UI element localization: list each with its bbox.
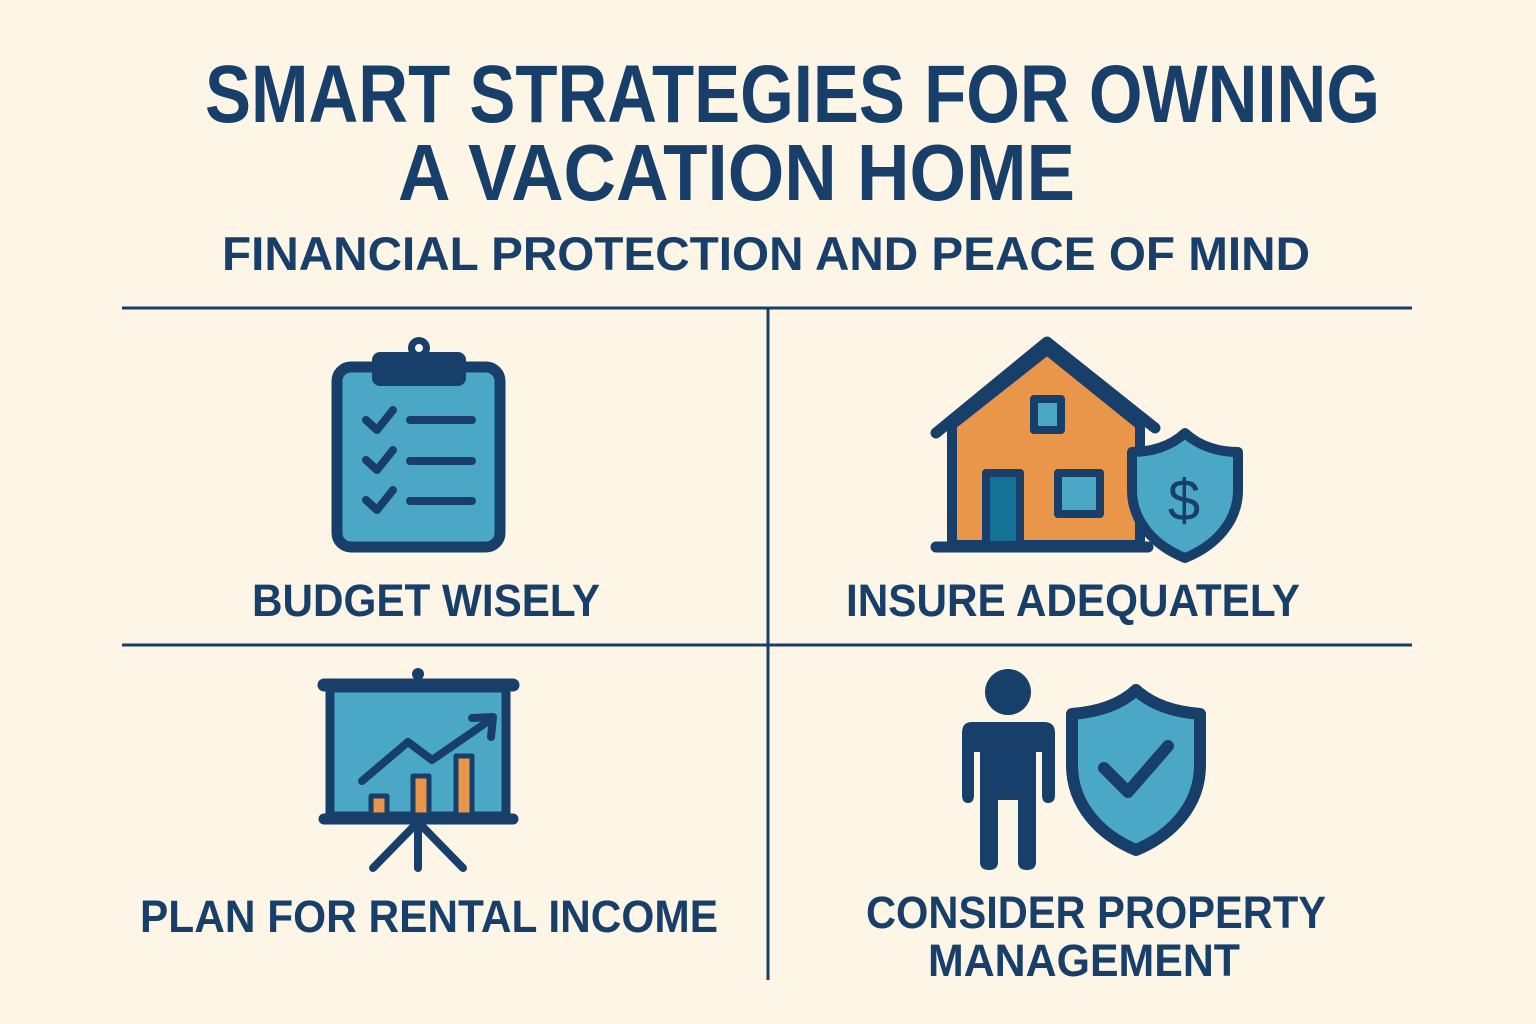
label: plan for rental income: PLAN FOR RENTAL INCOME bbox=[140, 891, 718, 942]
icon: clipboard bbox=[337, 337, 500, 547]
label: consider property management bbox=[866, 887, 1326, 986]
icon: house bbox=[936, 342, 1155, 547]
panel: property management bbox=[866, 669, 1326, 986]
icon: person bbox=[962, 669, 1055, 870]
title: A VACATION HOME bbox=[398, 128, 1075, 217]
title bbox=[205, 49, 1380, 217]
label: insure adequately: INSURE ADEQUATELY bbox=[846, 575, 1300, 626]
label: consider property management: MANAGEMENT bbox=[928, 935, 1240, 986]
label: consider property management: CONSIDER PROPERTY bbox=[866, 887, 1326, 938]
panel: insure adequately bbox=[846, 342, 1300, 626]
icon: shield check bbox=[1072, 690, 1200, 850]
icon: shield dollar bbox=[1132, 433, 1238, 558]
panel: budget wisely bbox=[252, 337, 600, 626]
panel: rental income bbox=[140, 668, 718, 942]
label: budget wisely: BUDGET WISELY bbox=[252, 575, 600, 626]
icon: shield dollar: $ bbox=[1168, 468, 1200, 533]
subtitle: FINANCIAL PROTECTION AND PEACE OF MIND bbox=[222, 227, 1310, 280]
icon: presentation chart bbox=[324, 668, 513, 868]
